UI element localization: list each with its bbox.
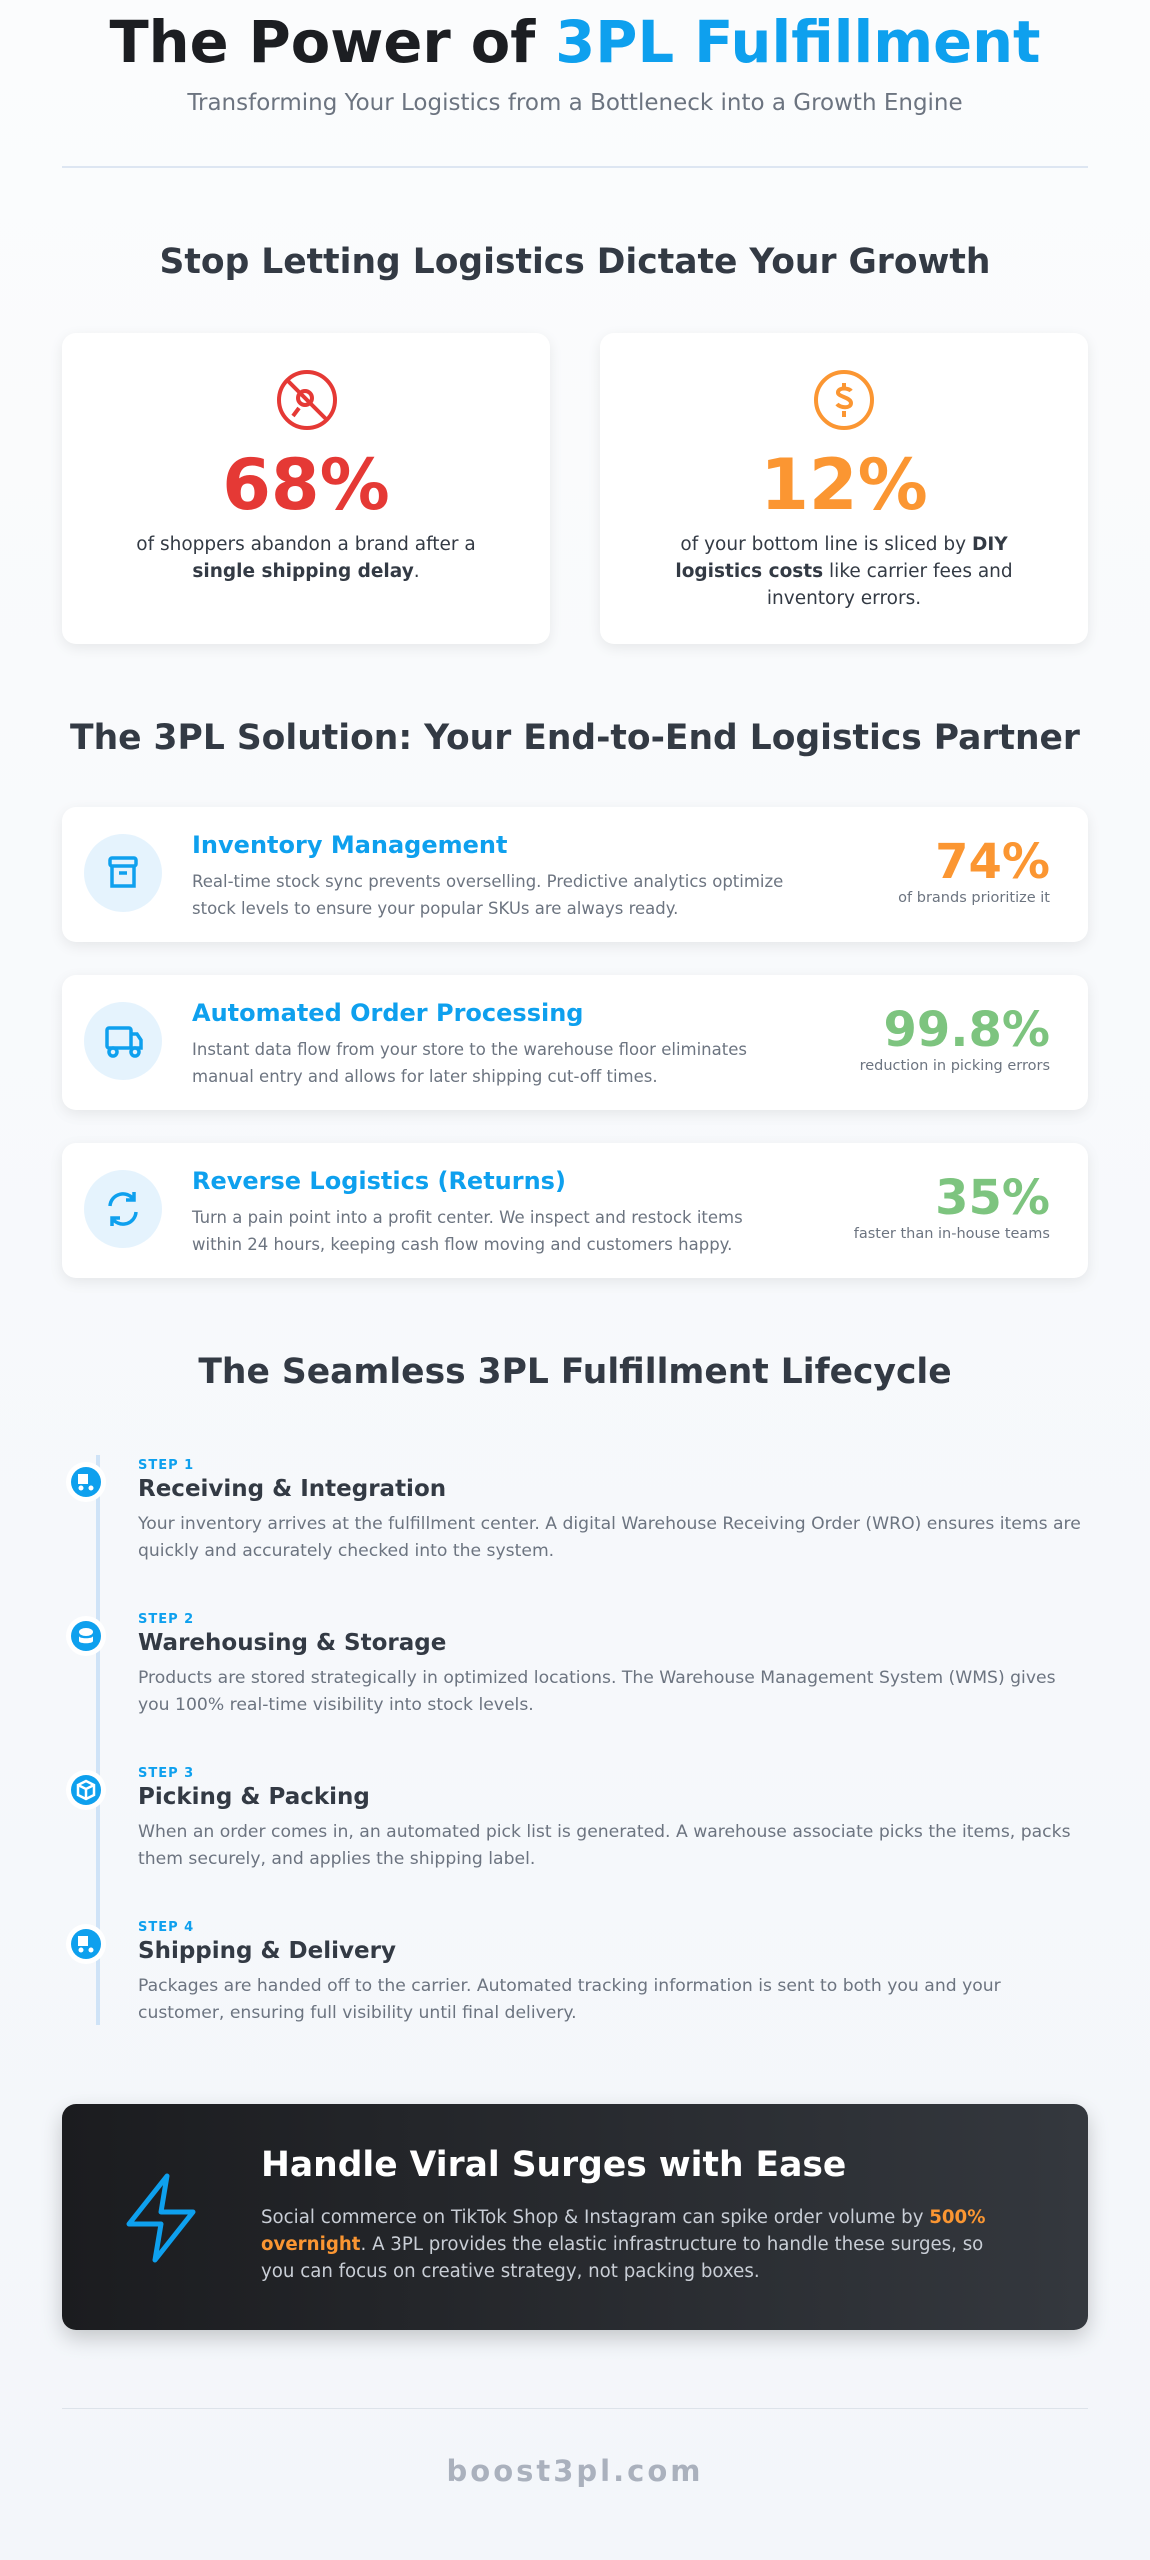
panel: reverse logistics: Reverse Logistics (Returns) (192, 1167, 566, 1195)
stat 74%: of brands prioritize it (898, 890, 1050, 906)
heading: solution: The 3PL Solution: Your End-to-End Logistics Partner (70, 718, 1080, 758)
icon: truck (84, 1002, 162, 1080)
stat 99.8%: reduction in picking errors (860, 1058, 1050, 1074)
icon: refresh (84, 1170, 162, 1248)
callout text: Social commerce on TikTok Shop & Instagram can spike order volume by 500% overnight. A 3PL provides the elastic infrastructure to handle these surges, so you can focus on creative strategy, not packing boxes. (261, 2207, 985, 2282)
number 68%: 68% (222, 444, 390, 526)
panel: reverse logistics (62, 1143, 1088, 1278)
text: of your bottom line is sliced by DIY logistics costs like carrier fees and inventory errors. (675, 534, 1013, 609)
number 12%: 12% (760, 444, 928, 526)
heading: lifecycle: The Seamless 3PL Fulfillment Lifecycle (198, 1352, 952, 1392)
subtitle: Transforming Your Logistics from a Bottleneck into a Growth Engine (187, 90, 963, 116)
callout: viral surges (62, 2104, 1088, 2330)
step 1: STEP 1 (138, 1458, 194, 1473)
text: of shoppers abandon a brand after a single shipping delay. (136, 534, 476, 582)
callout title: Handle Viral Surges with Ease (261, 2145, 846, 2185)
icon: step 1 (66, 1462, 106, 1502)
panel: automated order processing: Instant data flow from your store to the warehouse floor eliminates manual entry and allows for later shipping cut-off times. (192, 1040, 747, 1086)
step 4: Packages are handed off to the carrier. Automated tracking information is sent to both you and your customer, ensuring full visibility until final delivery. (138, 1976, 1001, 2023)
stat 35%: 35% (935, 1170, 1050, 1226)
icon: step 4 (66, 1924, 106, 1964)
panel: automated order processing: Automated Order Processing (192, 999, 583, 1027)
icon: lightning (126, 2174, 196, 2262)
footer: boost3pl.com (447, 2454, 703, 2488)
icon: step 2 (66, 1616, 106, 1656)
stat 74% (898, 834, 1050, 906)
stat 99.8% (860, 1002, 1050, 1074)
panel: inventory management: Inventory Management (192, 831, 507, 859)
stat 35%: faster than in-house teams (854, 1226, 1050, 1242)
icon: box (84, 834, 162, 912)
step 1: Receiving & Integration (138, 1476, 446, 1502)
step 1: Your inventory arrives at the fulfillment center. A digital Warehouse Receiving Order (WRO) ensures items are quickly and accurately checked into the system. (138, 1514, 1081, 1561)
step 3: When an order comes in, an automated pick list is generated. A warehouse associate picks the items, packs them securely, and applies the shipping label. (138, 1822, 1071, 1869)
step 3 (66, 1766, 1071, 1869)
step 3: STEP 3 (138, 1766, 194, 1781)
heading: stop letting: Stop Letting Logistics Dictate Your Growth (160, 242, 990, 282)
panel: automated order processing (62, 975, 1088, 1110)
panel: inventory management (62, 807, 1088, 942)
panel: 12% stat (600, 333, 1088, 644)
icon: step 3 (66, 1770, 106, 1810)
step 4 (66, 1920, 1001, 2023)
step 4: STEP 4 (138, 1920, 194, 1935)
stat 35% (854, 1170, 1050, 1242)
icon: dollar (814, 370, 874, 430)
step 2: Products are stored strategically in optimized locations. The Warehouse Management System (WMS) gives you 100% real-time visibility into stock levels. (138, 1668, 1056, 1715)
panel: reverse logistics: Turn a pain point into a profit center. We inspect and restock items within 24 hours, keeping cash flow moving and customers happy. (192, 1208, 743, 1254)
stat 74%: 74% (935, 834, 1050, 890)
panel: inventory management: Real-time stock sync prevents overselling. Predictive analytics optimize stock levels to ensure your popular SKUs are always ready. (192, 872, 783, 918)
step 4: Shipping & Delivery (138, 1938, 396, 1964)
step 2 (66, 1612, 1056, 1715)
icon: no shipping (277, 370, 337, 430)
step 1 (66, 1458, 1081, 1561)
timeline line (96, 1455, 100, 2025)
step 2: STEP 2 (138, 1612, 194, 1627)
step 3: Picking & Packing (138, 1784, 370, 1810)
stat 99.8%: 99.8% (883, 1002, 1050, 1058)
panel: 68% stat (62, 333, 550, 644)
step 2: Warehousing & Storage (138, 1630, 446, 1656)
title: The Power of 3PL Fulfillment (109, 9, 1041, 76)
